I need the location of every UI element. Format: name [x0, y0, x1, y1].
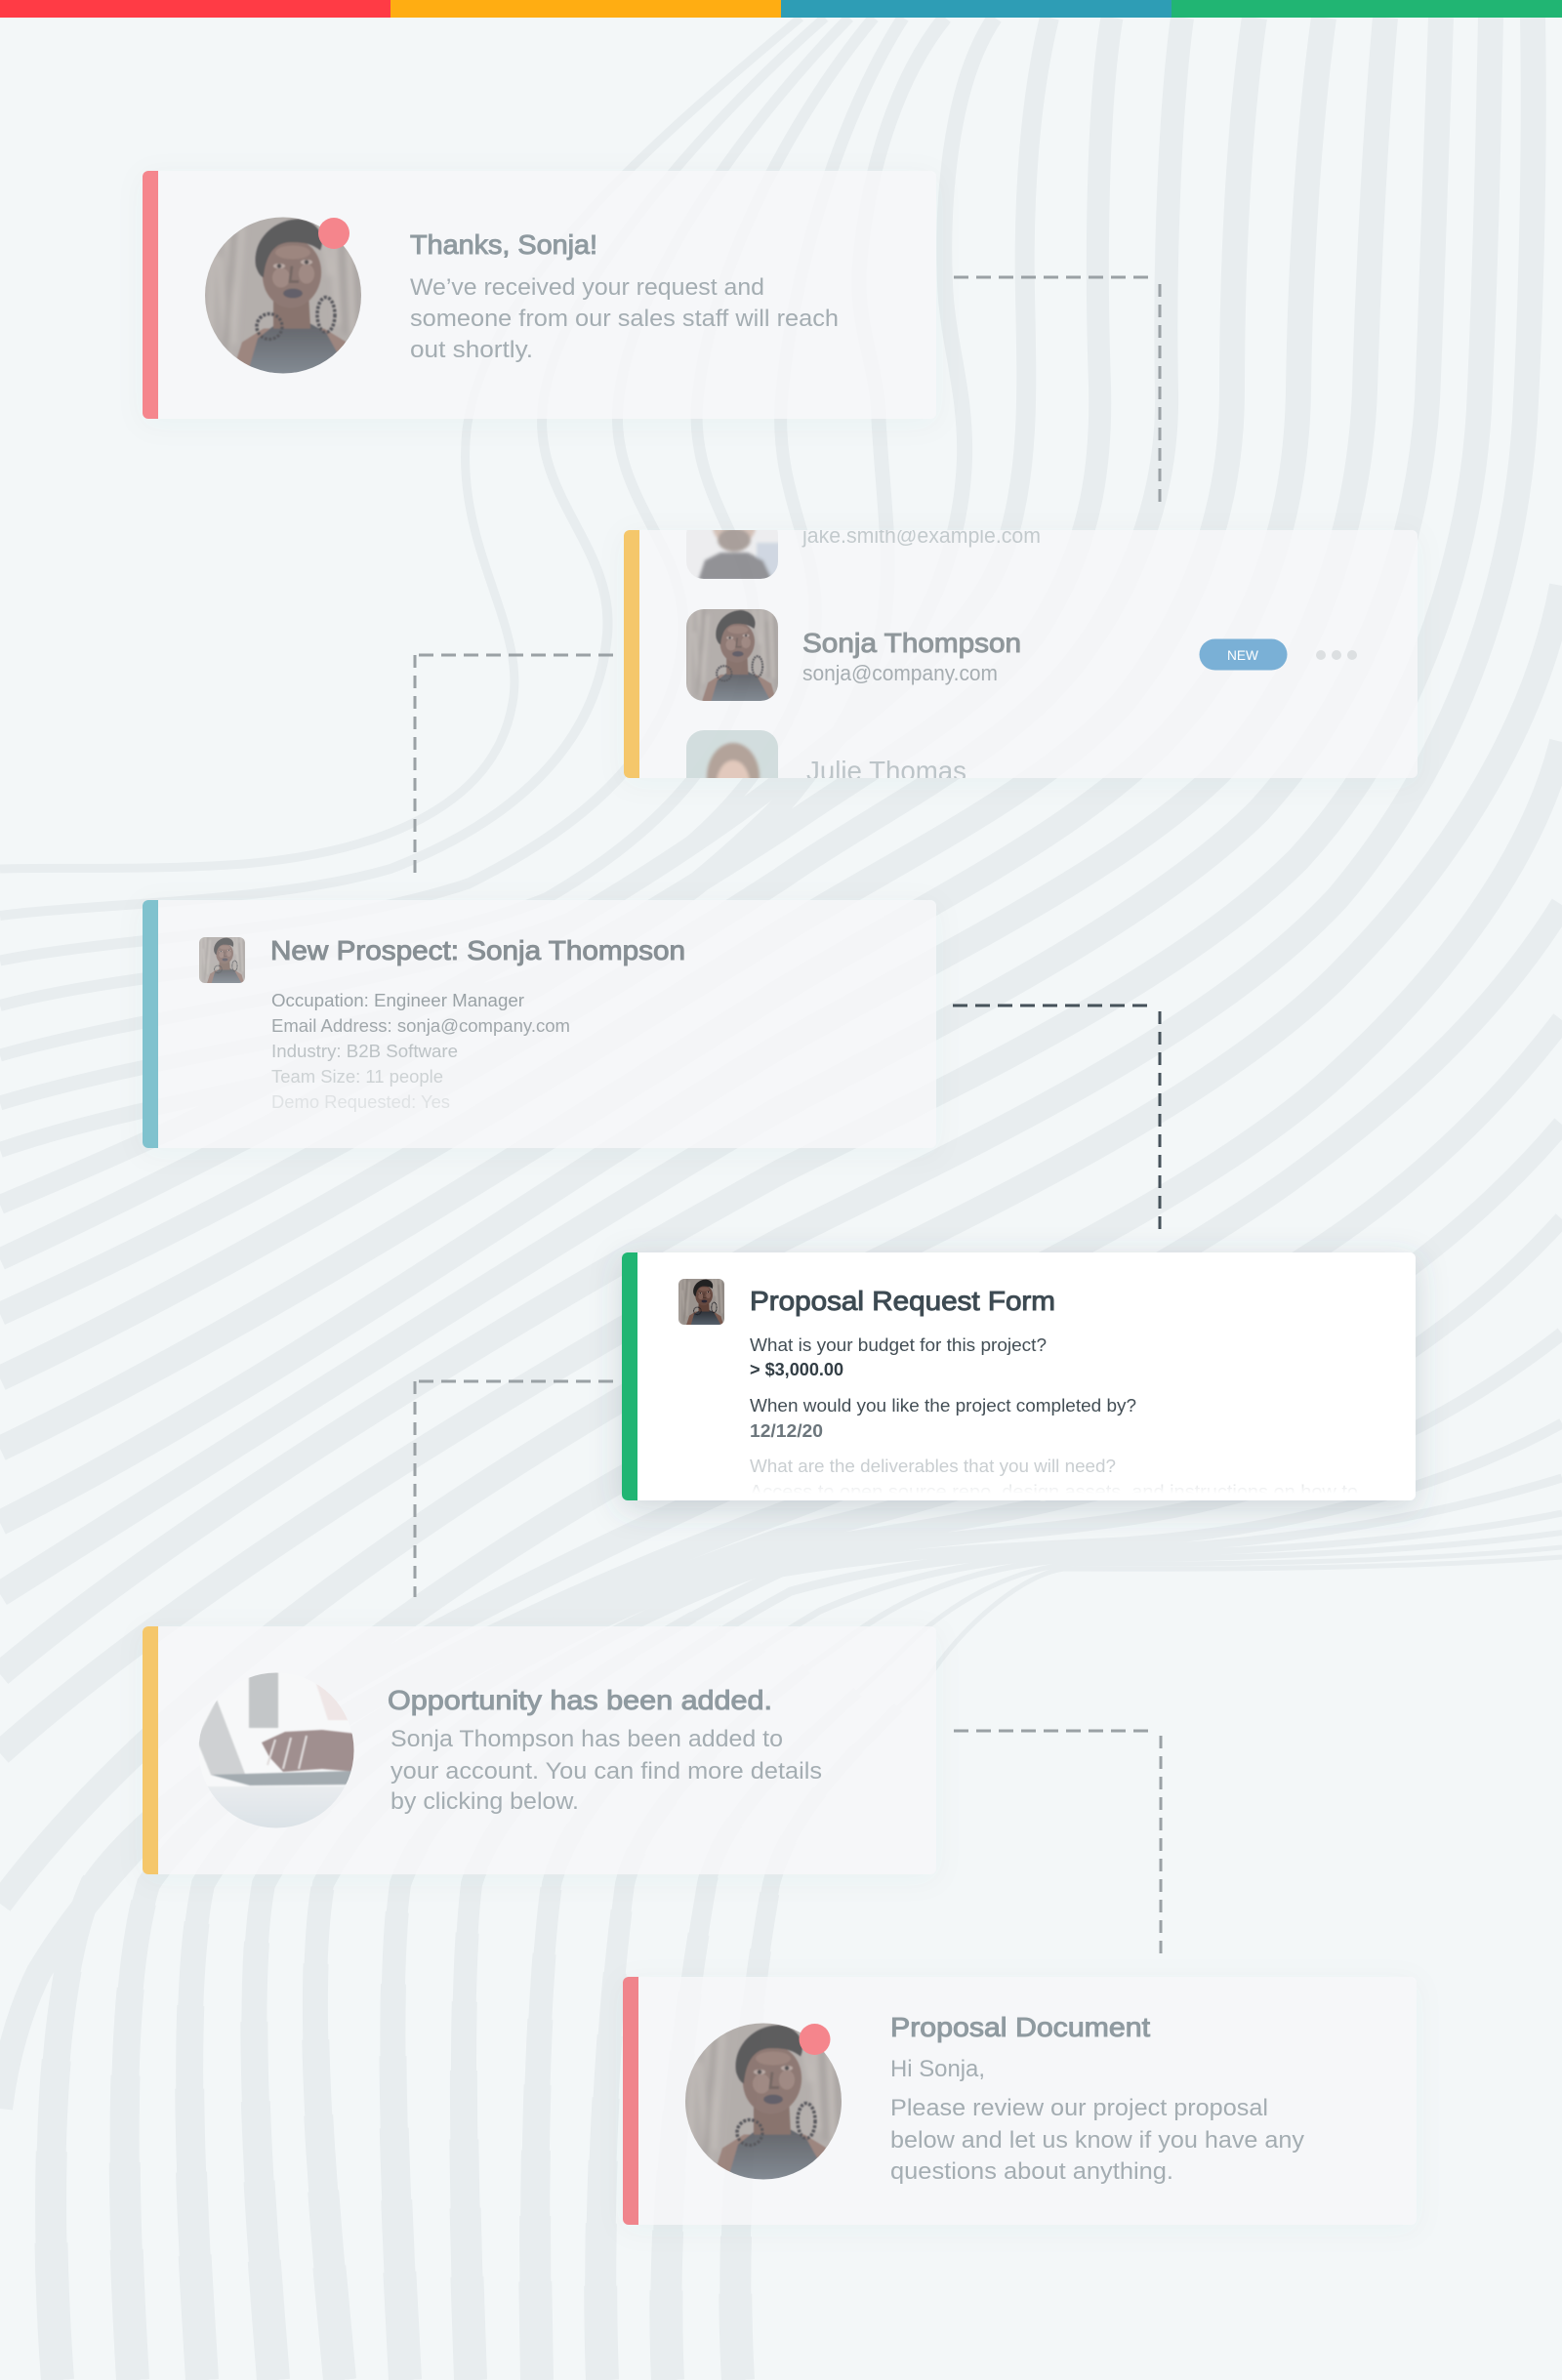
message text: Sonja Thompson has been added to	[390, 1726, 783, 1752]
form questions and answers: Access to open source repo, design assets, and instructions on how to	[750, 1482, 1358, 1501]
form questions and answers: > $3,000.00	[750, 1360, 843, 1379]
icon: notification dot	[799, 2024, 830, 2055]
avatar: Sonja	[686, 609, 778, 701]
avatar: Sonja portrait	[205, 217, 361, 373]
badge: NEW	[1199, 638, 1287, 670]
avatar: small Sonja	[678, 1279, 724, 1325]
prospect details: Email Address: sonja@company.com	[271, 1016, 570, 1036]
message text: your account. You can find more details	[390, 1758, 822, 1785]
text: Sonja email: sonja@company.com	[802, 661, 998, 685]
heading: proposal document: Proposal Document	[890, 2012, 1150, 2042]
prospect details	[271, 991, 570, 1112]
panel: proposal document	[623, 1977, 1304, 2225]
arrow: connector 4	[415, 1381, 613, 1597]
message text	[390, 1726, 822, 1815]
panel: opportunity added	[143, 1626, 936, 1874]
avatar: Julie	[686, 730, 778, 778]
panel: new prospect	[143, 900, 936, 1148]
message text	[410, 274, 839, 363]
text: Sonja name: Sonja Thompson	[802, 628, 1021, 658]
text: Jake email: jake.smith@example.com	[802, 523, 1041, 548]
arrow: connector 3 (active)	[953, 1005, 1160, 1229]
avatar: Jake	[686, 530, 778, 579]
prospect details: Demo Requested: Yes	[271, 1092, 450, 1112]
message text: Hi Sonja,	[890, 2056, 985, 2082]
form questions and answers: What are the deliverables that you will need?	[750, 1457, 1116, 1476]
message text: out shortly.	[410, 337, 533, 363]
avatar: Sonja portrait	[685, 2023, 842, 2179]
prospect details: Industry: B2B Software	[271, 1042, 458, 1061]
heading: opportunity: Opportunity has been added.	[388, 1685, 772, 1715]
list rows clipped by panel	[686, 530, 1357, 778]
heading: proposal request: Proposal Request Form	[750, 1286, 1055, 1316]
form questions and answers: 12/12/20	[750, 1421, 823, 1441]
form questions and answers	[750, 1335, 1358, 1501]
text: Julie name: Julie Thomas	[806, 756, 966, 786]
arrow: connector 5	[954, 1731, 1161, 1954]
icon: notification dot	[318, 218, 349, 249]
message text: We’ve received your request and	[410, 274, 764, 301]
arrow: connector 1	[954, 277, 1160, 503]
prospect details: Team Size: 11 people	[271, 1067, 443, 1087]
top colour bar	[0, 0, 1562, 18]
arrow: connector 2	[415, 655, 613, 873]
panel: thanks message	[143, 171, 936, 419]
prospect details: Occupation: Engineer Manager	[271, 991, 524, 1010]
avatar: small Sonja	[199, 937, 245, 983]
image: laptop and typing hands	[199, 1673, 353, 1827]
message text: by clicking below.	[390, 1788, 579, 1815]
heading: thanks: Thanks, Sonja!	[410, 229, 597, 260]
form questions and answers: What is your budget for this project?	[750, 1335, 1047, 1355]
message text	[890, 2056, 1304, 2185]
panel: prospect list	[624, 530, 1418, 778]
badge: NEW: NEW	[1227, 647, 1259, 663]
message text: below and let us know if you have any	[890, 2127, 1304, 2154]
form questions and answers: When would you like the project completed by?	[750, 1396, 1136, 1416]
message text: questions about anything.	[890, 2158, 1173, 2185]
panel: proposal request form	[622, 1252, 1416, 1501]
icon: more dots	[1316, 650, 1357, 660]
heading: new prospect: New Prospect: Sonja Thompson	[270, 935, 685, 965]
message text: someone from our sales staff will reach	[410, 306, 839, 332]
message text: Please review our project proposal	[890, 2095, 1268, 2121]
